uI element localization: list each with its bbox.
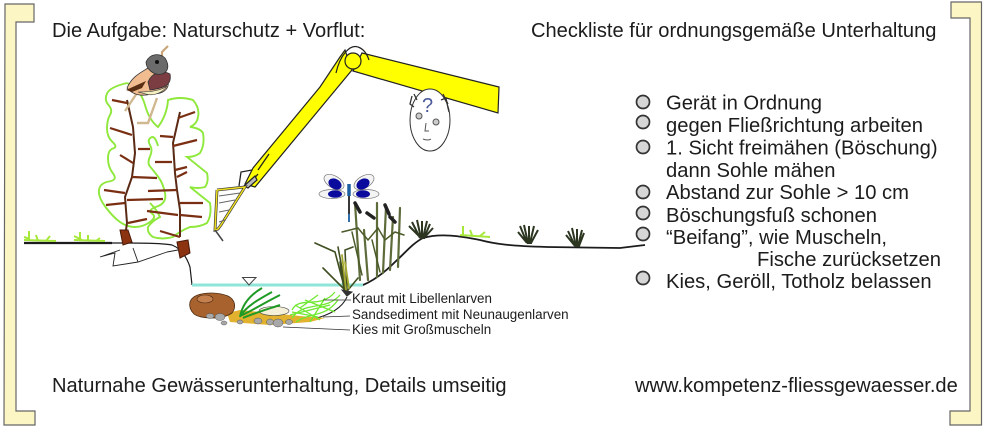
icon: water level triangle [242,278,256,285]
mussel [259,306,289,316]
checklist item 2: gegen Fließrichtung arbeiten [666,115,923,137]
gravel [206,314,292,327]
green weed [290,292,340,322]
elbow joint [345,53,361,69]
boulder [190,293,235,318]
checklist item 6: “Beifang”, wie Muscheln, [666,227,887,249]
checklist item 3 [636,138,938,182]
heading: task: Die Aufgabe: Naturschutz + Vorflut: [52,20,365,42]
shrubs with foliage [99,83,211,266]
icon: bird [125,46,170,123]
foliage outline [99,83,211,238]
bracket: left [4,4,35,425]
reed plants on bank [315,203,404,296]
water plant [240,288,280,318]
footer: website: www.kompetenz-fliessgewaesser.de [634,375,958,397]
icon: puzzled face [410,89,450,151]
label: gravel: Kies mit Großmuscheln [352,322,491,337]
sand sediment [227,310,325,325]
checklist item 7: Kies, Geröll, Totholz belassen [666,271,932,293]
water level line [192,284,363,286]
question mark: ? [422,95,433,117]
upper boom [353,53,499,113]
label: herbs: Kraut mit Libellenlarven [352,291,492,306]
checklist item 6: Fische zurücksetzen [757,249,941,271]
checklist [636,92,941,293]
checklist item 5: Böschungsfuß schonen [666,205,877,227]
footer: details: Naturnahe Gewässerunterhaltung, Details umseitig [52,375,507,397]
right shrub branches [173,112,180,237]
lower boom [245,50,352,187]
leader lines [283,300,351,330]
heading: checklist: Checkliste für ordnungsgemäße Unterhaltung [531,20,936,42]
checklist item 3: 1. Sicht freimähen (Böschung) [666,138,938,160]
icon: dragonfly [319,171,379,222]
stream bed [190,288,340,327]
excavator bucket [215,187,245,241]
bracket: right [950,2,982,425]
label: sand: Sandsediment mit Neunaugenlarven [352,307,569,322]
left shrub branches [125,100,135,237]
green grass [24,226,490,241]
checklist item 1: Gerät in Ordnung [666,92,822,114]
checklist item 3: dann Sohle mähen [666,160,835,182]
checklist item 4: Abstand zur Sohle > 10 cm [666,182,909,204]
checklist item 6 [636,227,941,271]
excavator arm [239,47,499,188]
bucket linkage [239,154,269,187]
grass tufts [409,220,584,246]
shrub roots [120,230,190,258]
ground profile [24,235,645,319]
